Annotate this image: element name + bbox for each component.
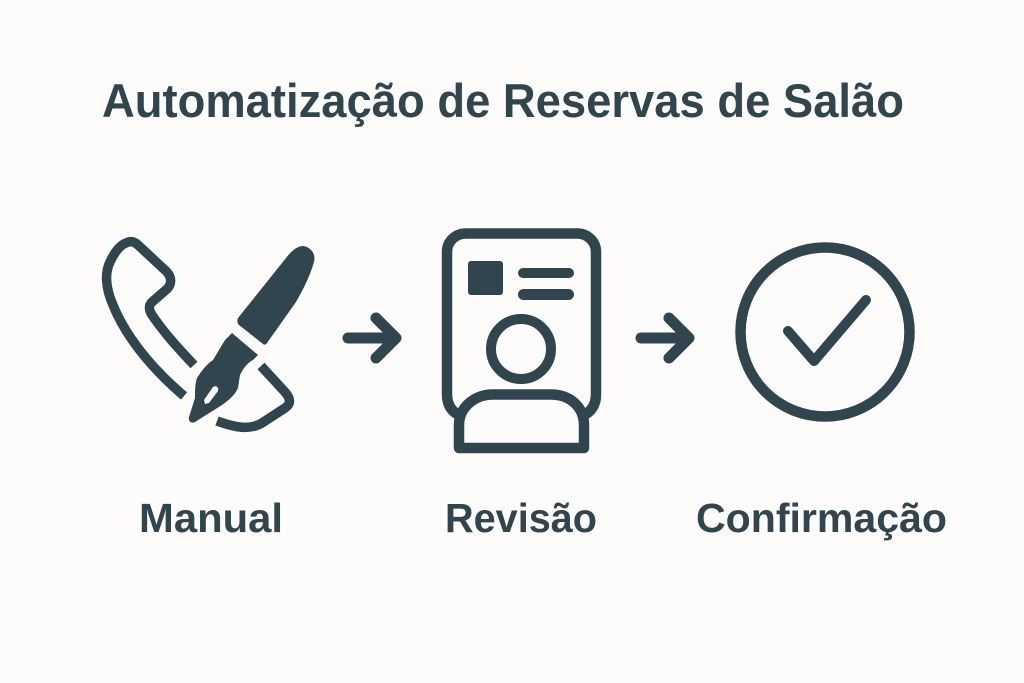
icon: check mark in circle	[740, 248, 910, 416]
label: Revisão: Revisão	[445, 495, 597, 541]
icon: review card with person	[447, 234, 596, 448]
photo square	[468, 261, 503, 295]
card outline	[447, 234, 596, 416]
person shoulders	[459, 394, 584, 448]
arrow: manual to review	[348, 318, 396, 358]
person head	[491, 319, 551, 379]
title: Automatização de Reservas de Salão	[102, 74, 904, 127]
text lines	[518, 268, 574, 300]
icon: phone and fountain pen (manual step)	[107, 242, 314, 427]
icon: fountain pen	[189, 246, 314, 423]
label: Confirmação: Confirmação	[696, 495, 947, 541]
arrow: review to confirmation	[641, 318, 689, 358]
label: Manual: Manual	[139, 495, 283, 541]
icon: telephone handset outline	[107, 242, 290, 427]
